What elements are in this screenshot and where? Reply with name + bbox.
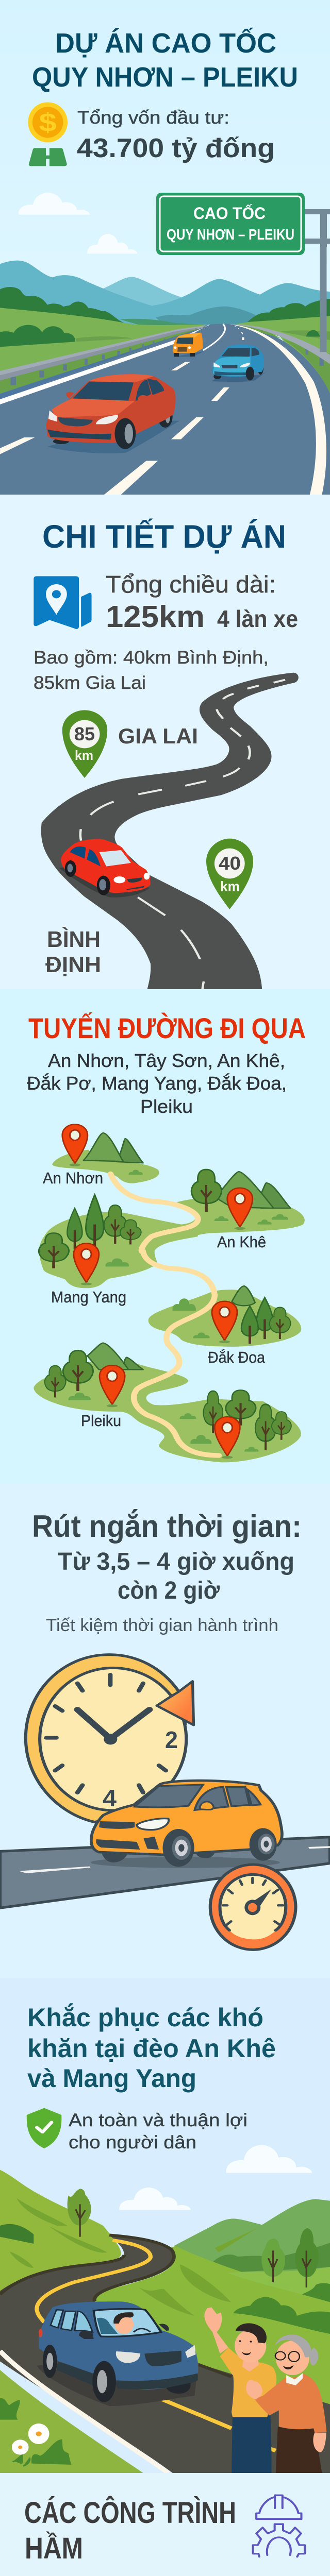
clouds	[226, 2145, 312, 2173]
flowers	[12, 2424, 50, 2455]
man waving	[204, 2307, 276, 2473]
heading: Khắc phục các khó	[27, 2003, 263, 2032]
investment amount: 43.700 tỷ đống	[77, 133, 275, 163]
localities list: An Nhơn, Tây Sơn, An Khê,	[48, 1050, 285, 1071]
sandy route	[110, 1174, 219, 1455]
panel: route	[0, 989, 330, 1484]
speedometer	[210, 1865, 295, 1950]
islands	[34, 1150, 305, 1462]
subtext: Tiết kiệm thời gian hành trình	[46, 1616, 278, 1635]
place labels: Mang Yang	[51, 1288, 126, 1306]
blue SUV	[37, 2301, 198, 2406]
highway scene	[0, 247, 330, 495]
localities list	[27, 1050, 287, 1117]
road lines	[0, 2351, 169, 2473]
pin 40 number: 40	[219, 853, 241, 874]
panel: overcoming passes	[0, 1978, 330, 2473]
highway sign: CAO TỐC	[193, 204, 266, 223]
heading: CÁC CÔNG TRÌNH	[24, 2496, 236, 2530]
clock number 4: 4	[103, 1785, 117, 1811]
heading: CHI TIẾT DỰ ÁN	[42, 518, 286, 555]
panel: tunnels	[0, 2473, 330, 2576]
highway sign	[156, 193, 330, 255]
red car	[46, 374, 179, 453]
place labels: Pleiku	[81, 1412, 121, 1430]
car	[91, 1781, 282, 1868]
pin: 85 km	[62, 710, 107, 778]
breakdown text: Bao gồm: 40km Bình Định,	[34, 648, 269, 668]
near right slope	[93, 2239, 330, 2415]
panel: project details	[0, 495, 330, 989]
length value: 125km	[106, 600, 205, 634]
trees	[68, 2189, 319, 2287]
route map	[34, 1124, 305, 1462]
place labels: Đắk Đoa	[208, 1348, 266, 1366]
heading: khăn tại đèo An Khê	[27, 2034, 276, 2063]
grandmother waving	[246, 2334, 326, 2473]
left hill	[0, 2170, 121, 2292]
label: Gia Lai: GIA LAI	[118, 724, 198, 748]
investment label: Tổng vốn đầu tư:	[77, 108, 229, 128]
lanes: 4 làn xe	[217, 605, 298, 632]
panel: hero	[0, 0, 330, 495]
title	[32, 28, 298, 93]
bushes on slope	[139, 2228, 257, 2316]
label: Binh Dinh: BÌNH	[47, 926, 101, 952]
orange van	[173, 333, 204, 357]
length label: Tổng chiều dài:	[106, 571, 276, 598]
label: Binh Dinh	[45, 926, 101, 977]
road surface	[0, 324, 330, 495]
panel: time saved	[0, 1484, 330, 1978]
icon: shield	[27, 2108, 61, 2148]
heading	[24, 2496, 236, 2565]
mountains	[84, 1133, 290, 1369]
icon: map pin	[34, 576, 92, 629]
winding road	[41, 673, 299, 989]
road, clock, car, gauge	[0, 1655, 330, 1950]
title: DỰ ÁN CAO TỐC	[55, 28, 276, 59]
safety text: An toàn và thuận lợi	[69, 2110, 248, 2130]
pin 85 number: 85	[74, 723, 95, 744]
bushes	[129, 1170, 143, 1175]
road	[0, 2235, 330, 2473]
place labels: An Khê	[217, 1233, 266, 1251]
far hills	[175, 2199, 330, 2312]
localities list: Đắk Pơ, Mang Yang, Đắk Đoa,	[27, 1073, 287, 1094]
heading: và Mang Yang	[27, 2064, 196, 2093]
safety text: cho người dân	[69, 2132, 196, 2153]
pins	[62, 1124, 88, 1166]
pin: 40 km	[206, 839, 253, 909]
time change: Từ 3,5 – 4 giờ xuống	[58, 1548, 294, 1575]
clock	[26, 1655, 185, 1822]
heading: Rút ngắn thời gian:	[32, 1509, 302, 1544]
time change	[58, 1548, 294, 1604]
blue car	[211, 345, 267, 382]
breakdown text: 85km Gia Lai	[34, 673, 146, 693]
time change: còn 2 giờ	[118, 1577, 220, 1604]
trees	[67, 1208, 82, 1250]
icon: helmet and gear	[253, 2495, 305, 2557]
title: QUY NHƠN – PLEIKU	[32, 62, 298, 93]
highway sign: QUY NHƠN – PLEIKU	[167, 227, 294, 243]
clock number 2: 2	[165, 1726, 178, 1753]
clouds	[19, 193, 138, 253]
left verge	[0, 2370, 143, 2473]
icon: coin and road	[28, 102, 68, 166]
mountain road scene	[0, 2145, 330, 2473]
place labels: An Nhơn	[43, 1169, 103, 1187]
place labels	[43, 1169, 266, 1430]
icon: coin and road: $	[39, 108, 57, 137]
road	[0, 1837, 330, 1908]
road lines	[0, 325, 210, 404]
safety text	[69, 2110, 248, 2153]
label: Binh Dinh: ĐỊNH	[45, 952, 101, 977]
pin 40 unit: km	[220, 878, 240, 894]
guard rails	[0, 326, 205, 380]
pin 85 unit: km	[75, 748, 93, 763]
heading: HẦM	[25, 2532, 83, 2565]
breakdown text	[34, 648, 269, 693]
localities list: Pleiku	[140, 1096, 193, 1117]
red car on winding road	[59, 839, 151, 897]
heading	[27, 2003, 276, 2093]
sign post	[320, 247, 326, 352]
